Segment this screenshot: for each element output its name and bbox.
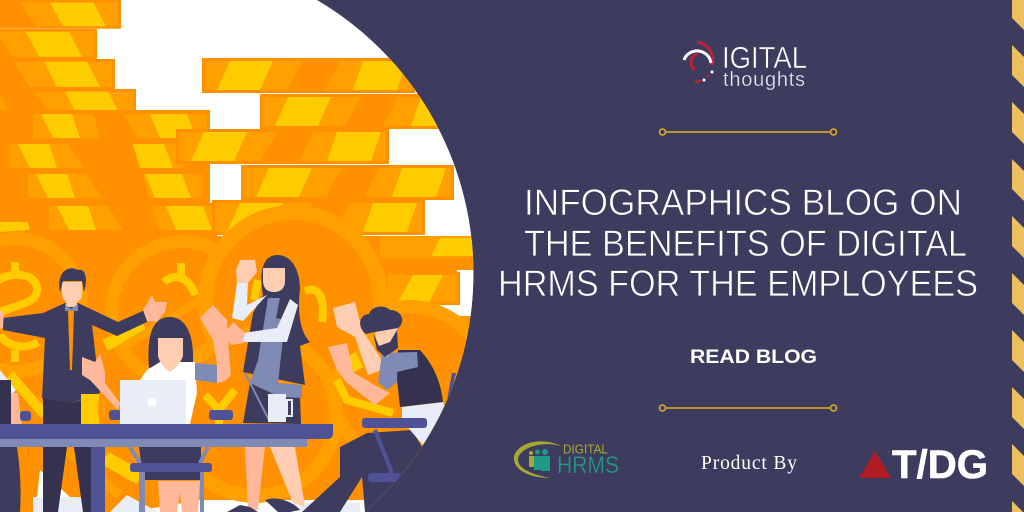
coins [0, 205, 495, 503]
dollar signs [0, 262, 393, 478]
white gap lower right [438, 270, 474, 316]
logo: Digital Thoughts [684, 40, 807, 91]
desk [0, 424, 333, 512]
title: THE BENEFITS OF DIGITAL [524, 223, 967, 264]
person: left edge seated [0, 370, 31, 512]
title [498, 182, 978, 304]
logo: Digital HRMS: DIGITAL [563, 442, 608, 456]
floor [33, 470, 360, 512]
call to action: READ BLOG [690, 347, 817, 368]
bar upper right of coins [380, 236, 474, 258]
mug: yellow [81, 394, 104, 424]
laptop [120, 380, 186, 424]
person: standing man in suit [0, 268, 167, 512]
person: seated woman with laptop [82, 305, 233, 512]
gold bars stack right [176, 58, 473, 235]
logo: T/DG: T/DG [892, 443, 988, 487]
diagonal bars behind desk [65, 300, 200, 495]
bar lower right [385, 272, 460, 305]
panel: circular illustration [0, 0, 495, 512]
logo: Digital Thoughts: IGITAL [722, 40, 807, 75]
lower orange mass [0, 236, 474, 512]
person: reclining man [302, 302, 456, 512]
divider bottom [660, 405, 836, 411]
logo: Digital HRMS: HRMS [557, 452, 619, 479]
gold bars stack left [0, 0, 217, 236]
title: INFOGRAPHICS BLOG ON [524, 182, 962, 223]
divider top [660, 129, 836, 135]
logo: Digital HRMS [514, 441, 619, 479]
person: standing woman [223, 255, 310, 512]
side stripes [1012, 0, 1024, 512]
logo: Digital Thoughts: thoughts [723, 69, 805, 91]
mug: white [268, 394, 292, 422]
product by label: Product By [701, 453, 797, 474]
title: HRMS FOR THE EMPLOYEES [498, 263, 978, 304]
